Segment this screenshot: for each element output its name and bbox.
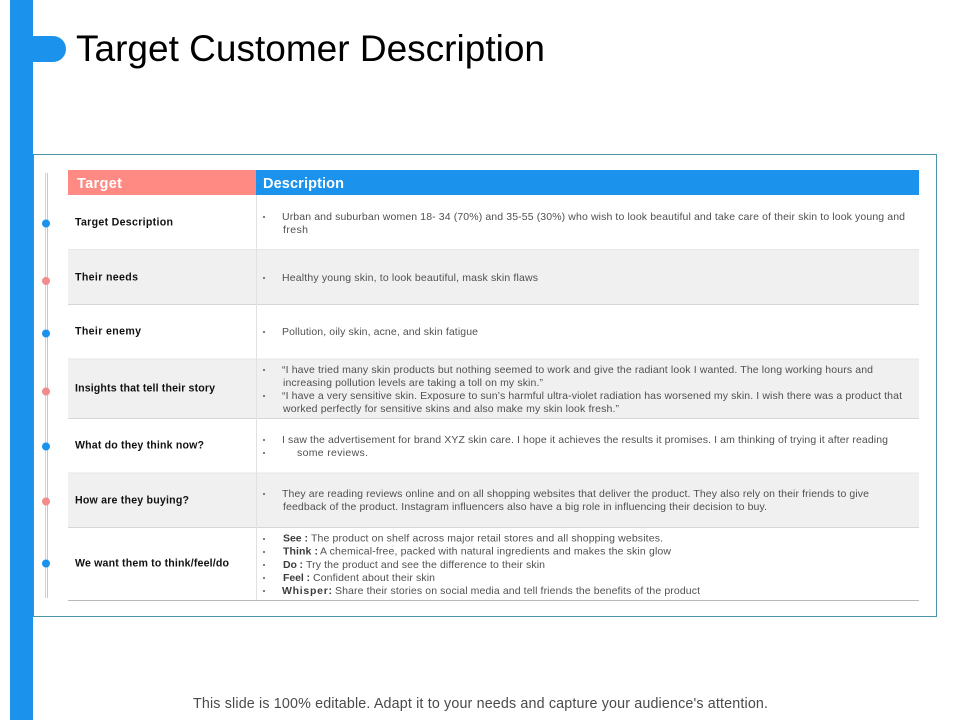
row: how are they buying xyxy=(68,473,919,527)
row: how are they buying: feedback of the product. Instagram influencers also have a big role in influencing their decision to buy. xyxy=(283,501,767,513)
row: their enemy: Pollution, oily skin, acne, and skin fatigue xyxy=(282,326,478,338)
title: Target Customer Description xyxy=(76,28,545,69)
row: insights that tell their story: Insights that tell their story xyxy=(75,382,215,394)
footer note: This slide is 100% editable. Adapt it to your needs and capture your audience's attention. xyxy=(193,696,768,712)
row: their needs xyxy=(68,249,919,304)
row: target description: fresh xyxy=(283,224,308,236)
row: we want them to think/feel/do: Feel : xyxy=(283,572,310,584)
row: what do they think now: What do they think now? xyxy=(75,440,204,452)
row: insights that tell their story: worked perfectly for sensitive skins and also make my skin look fresh.” xyxy=(282,403,620,415)
timeline dot 3 xyxy=(42,330,50,338)
row: insights that tell their story xyxy=(68,359,919,418)
row: we want them to think/feel/do: Do : xyxy=(283,559,303,571)
row: we want them to think/feel/do: Think : xyxy=(283,546,318,558)
row: we want them to think/feel/do: We want them to think/feel/do xyxy=(75,558,230,570)
row: insights that tell their story: “I have a very sensitive skin. Exposure to sun’s harmful ultra-violet radiation has worsened my skin. I wish there was a product that xyxy=(282,390,902,402)
table header: description xyxy=(256,170,919,195)
row: their enemy: Their enemy xyxy=(75,326,141,338)
row: we want them to think/feel/do: The product on shelf across major retail stores and all shopping websites. xyxy=(311,532,663,544)
row: we want them to think/feel/do: Confident about their skin xyxy=(313,572,435,584)
row: target description xyxy=(68,195,919,249)
timeline dot 2 xyxy=(42,277,50,285)
row: we want them to think/feel/do xyxy=(68,527,919,600)
row: we want them to think/feel/do: Whisper: xyxy=(282,585,332,597)
table header: target xyxy=(68,170,256,195)
timeline dot 6 xyxy=(42,498,50,506)
row: what do they think now: I saw the advertisement for brand XYZ skin care. I hope it achieves the results it promises. I am thinking of trying it after reading xyxy=(282,434,888,446)
row: target description: Target Description xyxy=(75,216,173,228)
row: their enemy xyxy=(68,304,919,359)
row: we want them to think/feel/do: Share their stories on social media and tell friends the benefits of the product xyxy=(335,585,700,597)
row: insights that tell their story: increasing pollution levels are taking a toll on my skin.” xyxy=(283,377,544,389)
row: their needs: Healthy young skin, to look beautiful, mask skin flaws xyxy=(282,272,538,284)
timeline dot 4 xyxy=(42,388,50,396)
row: we want them to think/feel/do: See : xyxy=(283,532,308,544)
row: we want them to think/feel/do: Try the product and see the difference to their skin xyxy=(306,559,545,571)
table header: description: Description xyxy=(263,176,344,192)
table xyxy=(68,170,919,601)
timeline dot 1 xyxy=(42,220,50,228)
row: how are they buying: How are they buying? xyxy=(75,494,189,506)
timeline xyxy=(42,173,50,598)
row: what do they think now: some reviews. xyxy=(297,447,368,459)
timeline dot 5 xyxy=(42,442,50,450)
timeline dot 7 xyxy=(42,560,50,568)
row: their needs: Their needs xyxy=(75,272,138,284)
sidebar bar with tab xyxy=(10,0,66,720)
table rules xyxy=(68,195,919,601)
row: insights that tell their story: “I have tried many skin products but nothing seemed to work and give the radiant look I wanted. The long working hours and xyxy=(282,364,873,376)
row: we want them to think/feel/do: A chemical-free, packed with natural ingredients and makes the skin glow xyxy=(320,546,671,558)
panel: table frame xyxy=(34,154,936,616)
table header: target: Target xyxy=(77,176,122,192)
row: how are they buying: They are reading reviews online and on all shopping websites that deliver the product. They also rely on their friends to give xyxy=(282,488,869,500)
row: what do they think now xyxy=(68,418,919,473)
row: target description: Urban and suburban women 18- 34 (70%) and 35-55 (30%) who wish to look beautiful and take care of their skin to look young and xyxy=(282,211,905,223)
